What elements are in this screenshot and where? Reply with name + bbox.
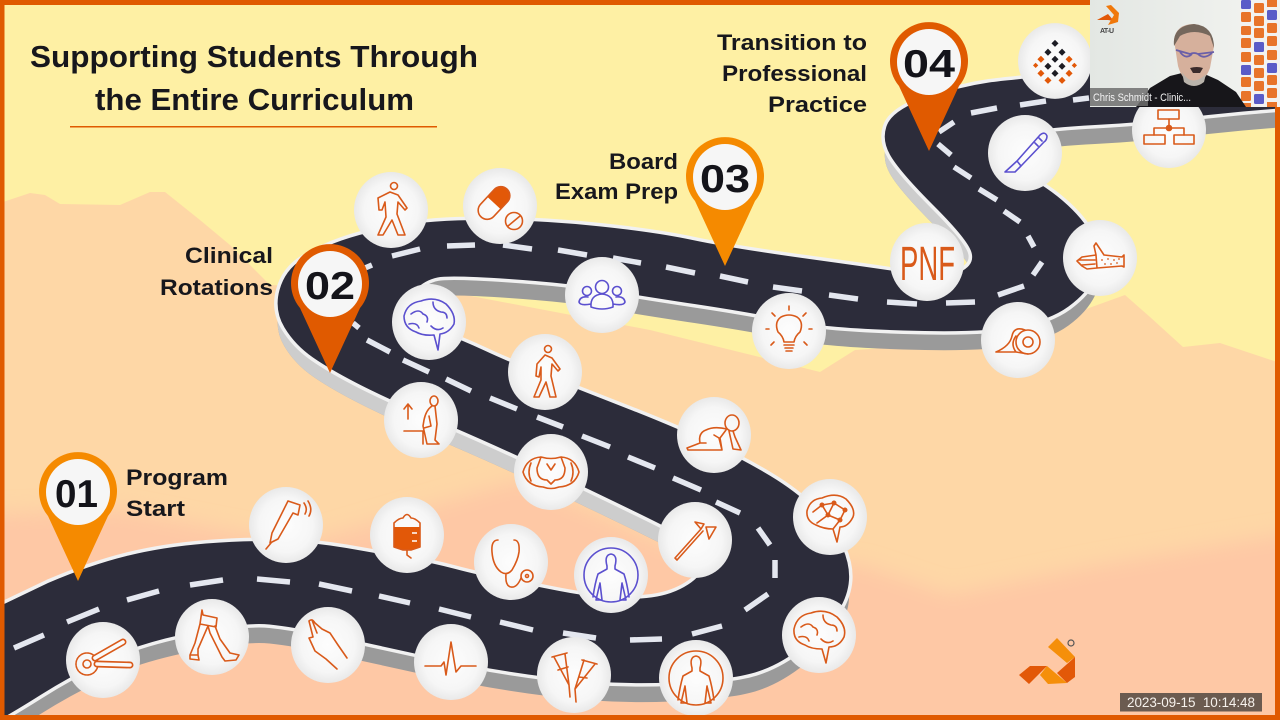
label: Program Start: Start — [126, 496, 186, 521]
icon stop: hand — [291, 607, 365, 683]
icon stop: walking figure — [354, 172, 428, 248]
icon stop: legs walking — [175, 599, 249, 675]
pin 01: 01 — [55, 473, 98, 516]
icon stop: PNF — [890, 223, 964, 301]
icon stop: crutches — [537, 637, 611, 713]
label: Transition to Professional Practice: Transition to — [717, 30, 867, 55]
icon stop: hand with cast — [1063, 220, 1137, 296]
icon stop: light bulb — [752, 293, 826, 369]
icon stop: group of people purple — [565, 257, 639, 333]
icon stop: body circle purple — [574, 537, 648, 613]
label: Transition to Professional Practice — [717, 30, 867, 117]
road centre dashes — [14, 98, 1089, 648]
icon stop: reflex hammer — [658, 502, 732, 578]
icon stop: stethoscope — [474, 524, 548, 600]
icon stop: pill and tablet — [463, 168, 537, 244]
pin 03 — [686, 137, 764, 266]
icon stop: flow chart — [1132, 92, 1206, 168]
icon stop: scalpel purple — [988, 115, 1062, 191]
background: lower mountain layer — [0, 480, 1280, 720]
label: Program Start — [126, 465, 228, 521]
icon stop: PNF: PNF — [900, 238, 955, 291]
title — [30, 39, 478, 128]
label: Clinical Rotations: Clinical — [185, 243, 273, 268]
icon stop: spinal cord section — [514, 434, 588, 510]
label: Clinical Rotations — [160, 243, 273, 300]
icon stop: heartbeat — [414, 624, 488, 700]
icon stop: brain outline — [782, 597, 856, 673]
label: Board Exam Prep: Exam Prep — [555, 179, 678, 204]
title: Supporting Students Through — [30, 39, 478, 74]
pin 04: 04 — [903, 43, 955, 86]
icon stop: ultrasound wand — [249, 487, 323, 563]
icon stop: arrow pattern logo — [1018, 23, 1092, 99]
title: the Entire Curriculum — [95, 82, 414, 117]
name tag: Chris Schmidt - Clinic... — [1093, 92, 1191, 104]
logo: bottom right — [1019, 638, 1075, 684]
icon stop: sit to stand — [384, 382, 458, 458]
person — [1136, 24, 1246, 107]
icon stop: brain purple — [392, 284, 466, 360]
pin 04 — [890, 22, 968, 151]
timestamp: 2023-09-15 10:14:48 — [1127, 695, 1255, 710]
label: Board Exam Prep — [555, 149, 678, 204]
background: mountain ridge — [0, 192, 1280, 720]
logo: AT-U: AT-U — [1100, 28, 1114, 35]
icon stop: body outline — [659, 640, 733, 716]
logo: AT-U — [1097, 5, 1119, 35]
icon stop: IV bag — [370, 497, 444, 573]
pin 03: 03 — [700, 158, 750, 201]
label: Program Start: Program — [126, 465, 228, 490]
icon stop: crawling baby — [677, 397, 751, 473]
label: Transition to Professional Practice: Professional — [722, 61, 867, 86]
icon stop: brain network — [793, 479, 867, 555]
video overlay — [1090, 0, 1280, 107]
name tag — [1090, 88, 1191, 106]
pin 01 — [39, 452, 117, 581]
icon stop: tape roll — [981, 302, 1055, 378]
label: Transition to Professional Practice: Practice — [768, 92, 867, 117]
tile strip — [1240, 0, 1280, 107]
icon stop: walking person — [508, 334, 582, 410]
label: Board Exam Prep: Board — [609, 149, 678, 174]
pin 02 — [291, 244, 369, 373]
icon stop: goniometer — [66, 622, 140, 698]
label: Clinical Rotations: Rotations — [160, 275, 273, 300]
pin 02: 02 — [305, 265, 355, 308]
